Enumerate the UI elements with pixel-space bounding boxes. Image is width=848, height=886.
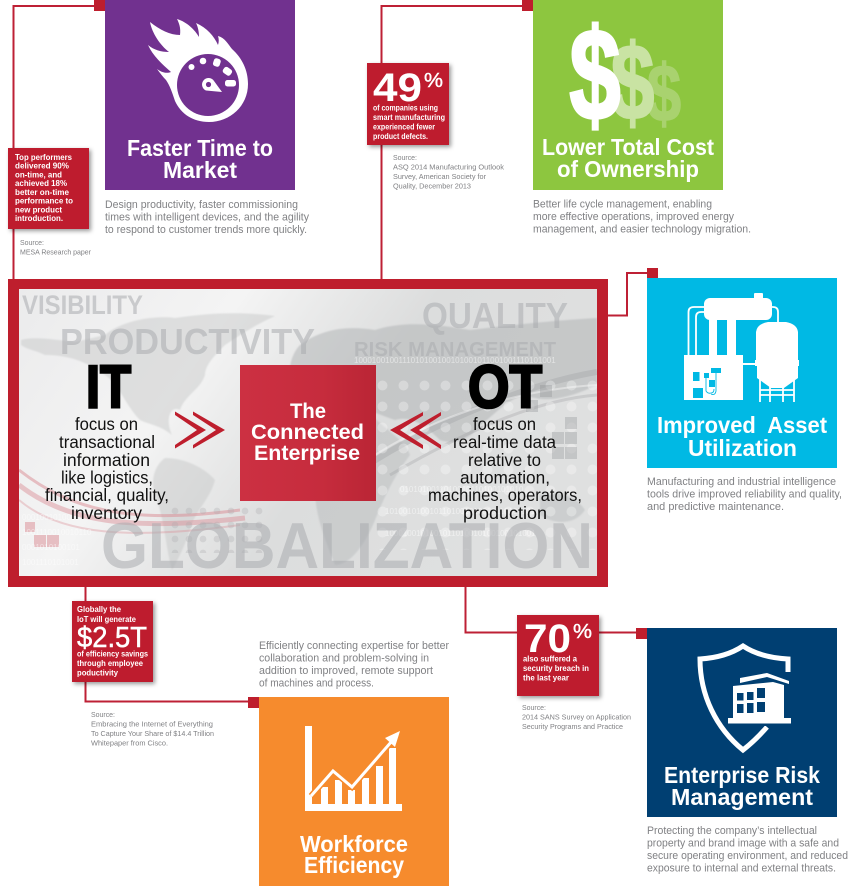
text: IT description: information: [63, 450, 150, 470]
title: improved asset utilization: Utilization: [688, 435, 797, 461]
source: cisco: Source:: [91, 710, 115, 719]
callout: 70 percent: the last year: [523, 672, 570, 682]
icon: dollar signs: $: [647, 49, 681, 139]
arrow: OT into center: [390, 412, 441, 449]
heading: OT: OT: [468, 354, 542, 420]
text: workforce efficiency description: [259, 640, 449, 690]
source: asq: ASQ 2014 Manufacturing Outlook: [393, 162, 504, 172]
callout: 70 percent: [517, 615, 599, 696]
text: OT description: production: [463, 503, 547, 523]
text: lower total cost description: Better life cycle management, enabling: [533, 198, 712, 210]
source: asq: Source:: [393, 153, 417, 162]
binary digits: 0001010100101: [22, 543, 80, 552]
callout: 49 percent: 49: [373, 66, 422, 110]
text: enterprise risk description: property and brand image with a safe and: [647, 838, 839, 850]
callout: top performers: Top performers: [15, 152, 72, 162]
text: workforce efficiency description: addition to improved, remote support: [259, 665, 433, 677]
callout: 70 percent: also suffered a: [523, 654, 577, 664]
text: IT description: [45, 414, 169, 523]
background: world map, swooshes and binary: [19, 290, 597, 582]
callout: 70 percent: security breach in: [523, 663, 589, 673]
binary digits: [26, 357, 556, 547]
panel: improved asset utilization: [647, 278, 837, 468]
box: the connected enterprise: Enterprise: [254, 441, 360, 465]
text: IT description: transactional: [59, 432, 155, 452]
callout: 49 percent: experienced fewer: [373, 122, 436, 132]
callout: 49 percent: [367, 63, 449, 145]
panel: lower total cost of ownership: [533, 0, 723, 190]
source: cisco: To Capture Your Share of $14.4 Trillion: [91, 729, 214, 738]
callout: top performers: on-time, and: [15, 170, 62, 180]
source: asq: [393, 153, 504, 190]
text: enterprise risk description: Protecting the company’s intellectual: [647, 825, 817, 837]
source: asq: Survey, American Society for: [393, 172, 487, 181]
icon: shield with building: [700, 646, 796, 750]
panel: workforce efficiency: [259, 697, 449, 886]
callout: top performers: [8, 148, 89, 229]
text: faster time to market description: to respond to customer trends more quickly.: [105, 224, 307, 236]
text: OT description: real-time data: [453, 432, 556, 452]
text: improved asset description: [647, 476, 842, 513]
icon: rising chart: [305, 726, 402, 811]
binary digits: 0001001010010: [22, 513, 80, 522]
background keywords: GLOBALIZATION: [101, 509, 593, 582]
text: IT description: like logistics,: [61, 468, 153, 488]
icon: industrial plant: [684, 293, 799, 402]
title: enterprise risk management: Enterprise Risk: [664, 762, 820, 788]
title: workforce efficiency: [300, 831, 408, 878]
text: OT description: relative to: [468, 450, 541, 470]
title: faster time to market: Market: [163, 157, 237, 183]
source: mesa: MESA Research paper: [20, 248, 92, 256]
source: sans: 2014 SANS Survey on Application: [522, 712, 631, 722]
source: cisco: [91, 710, 214, 748]
text: OT description: [428, 414, 582, 523]
text: faster time to market description: Design productivity, faster commissioning: [105, 199, 298, 211]
connector nodes: [94, 0, 658, 708]
title: lower total cost of ownership: Lower Total Cost: [542, 134, 714, 160]
background keywords: [22, 290, 593, 582]
binary digits: 1000100100111010100100101001011001001110101001: [354, 356, 556, 365]
title: enterprise risk management: Management: [671, 784, 813, 810]
text: lower total cost description: [533, 198, 751, 236]
title: lower total cost of ownership: of Ownership: [557, 156, 699, 182]
panel: faster time to market: [105, 0, 295, 190]
text: enterprise risk description: [647, 825, 848, 874]
source: mesa: [20, 238, 92, 256]
title: workforce efficiency: Efficiency: [304, 852, 404, 878]
text: improved asset description: and predictive maintenance.: [647, 501, 784, 513]
callout: 2.5T: of efficiency savings: [77, 648, 148, 658]
text: enterprise risk description: exposure to internal and external threats.: [647, 862, 836, 874]
callout: top performers: better on-time: [15, 187, 69, 197]
binary digits: 1000100101001011010010100100101001: [385, 529, 536, 538]
icon: dollar signs: [569, 2, 681, 147]
heading: IT: IT: [86, 354, 131, 420]
callout: 2.5T: [72, 601, 153, 682]
background keywords: PRODUCTIVITY: [60, 321, 315, 362]
text: IT description: financial, quality,: [45, 485, 169, 505]
title: workforce efficiency: Workforce: [300, 831, 408, 857]
callout: 70 percent: 70: [524, 617, 571, 661]
callout: 2.5T: poductivity: [77, 668, 118, 678]
box: the connected enterprise: Connected: [251, 420, 364, 444]
title: faster time to market: [127, 135, 273, 183]
source: sans: [522, 703, 631, 731]
text: OT description: machines, operators,: [428, 485, 582, 505]
text: IT description: focus on: [75, 414, 138, 434]
text: workforce efficiency description: Efficiently connecting expertise for better: [259, 640, 449, 652]
source: sans: Security Programs and Practice: [522, 722, 623, 731]
icon: dollar signs: $: [569, 2, 621, 147]
callout: top performers: new product: [15, 204, 62, 214]
box: the connected enterprise: [240, 365, 376, 501]
text: workforce efficiency description: collaboration and problem-solving in: [259, 652, 429, 664]
text: OT description: focus on: [473, 414, 536, 434]
arrow: IT into center: [175, 412, 225, 448]
title: improved asset utilization: [657, 412, 827, 461]
panel: central connected enterprise frame: [8, 279, 608, 587]
text: faster time to market description: [105, 199, 309, 236]
background keywords: RISK MANAGEMENT: [354, 339, 556, 361]
box: the connected enterprise: The: [290, 399, 326, 423]
text: lower total cost description: management, and easier technology migration.: [533, 224, 751, 236]
callout: 49 percent: of companies using: [373, 102, 438, 112]
source: sans: Source:: [522, 703, 546, 712]
callout: 2.5T: through employee: [77, 658, 143, 668]
callout: top performers: delivered 90%: [15, 160, 70, 170]
callout: top performers: achieved 18%: [15, 178, 68, 188]
source: cisco: Embracing the Internet of Everything: [91, 720, 213, 728]
title: improved asset utilization: Improved Asset: [657, 412, 827, 438]
callout: 2.5T: Globally the: [77, 604, 121, 614]
callout: 2.5T: $2.5T: [77, 622, 147, 654]
panel: enterprise risk management: [647, 628, 837, 817]
text: faster time to market description: times with intelligent devices, and the agility: [105, 212, 309, 224]
title: faster time to market: Faster Time to: [127, 135, 273, 161]
icon: flaming speedometer: [148, 19, 248, 122]
text: improved asset description: Manufacturing and industrial intelligence: [647, 476, 836, 488]
connector lines: [14, 6, 650, 702]
text: lower total cost description: more effective operations, improved energy: [533, 211, 734, 223]
binary digits: 1010010100101101001010010110100101: [385, 507, 536, 516]
source: asq: Quality, December 2013: [393, 182, 471, 190]
background keywords: VISIBILITY: [22, 290, 143, 320]
binary digits: 1001110010010110: [22, 528, 92, 537]
title: enterprise risk management: [664, 762, 820, 810]
callout: 2.5T: IoT will generate: [77, 614, 136, 624]
callout: 49 percent: product defects.: [373, 131, 428, 141]
binary digits: 1001110101001: [22, 558, 79, 567]
callout: 49 percent: %: [424, 70, 443, 92]
source: mesa: Source:: [20, 238, 44, 247]
icon: dollar signs: $: [611, 22, 654, 143]
callout: 49 percent: smart manufacturing: [373, 112, 445, 122]
source: cisco: Whitepaper from Cisco.: [91, 738, 168, 748]
callout: top performers: introduction.: [15, 213, 63, 223]
background keywords: QUALITY: [422, 295, 568, 336]
text: IT description: inventory: [71, 503, 142, 523]
text: workforce efficiency description: of machines and process.: [259, 678, 374, 690]
text: improved asset description: tools drive improved reliability and quality,: [647, 488, 842, 500]
callout: 70 percent: %: [573, 621, 592, 643]
text: OT description: automation,: [460, 468, 550, 488]
binary digits: 0101010011010010110100101010: [400, 485, 524, 494]
title: lower total cost of ownership: [542, 134, 714, 182]
callout: top performers: performance to: [15, 196, 73, 206]
